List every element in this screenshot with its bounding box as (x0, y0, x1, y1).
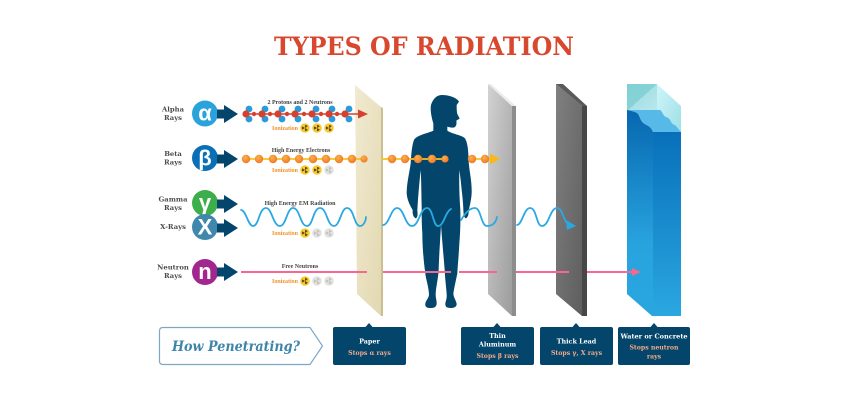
icon: neutron (192, 259, 218, 285)
label: x-rays: X-Rays (160, 223, 186, 231)
arrow: gamma (217, 195, 238, 213)
info box: thin aluminum: Thin (489, 332, 506, 340)
arrow: beta (217, 150, 238, 168)
ionization: beta (272, 165, 334, 175)
info box: thick lead: Stops γ, X rays (551, 350, 603, 357)
beta particle stream (242, 154, 500, 164)
icon: beta (192, 145, 218, 171)
arrow: x (217, 219, 238, 237)
info box: water or concrete: Stops neutron (629, 344, 679, 352)
info box: thin aluminum: Stops β rays (476, 353, 519, 360)
caption: alpha: 2 Protons and 2 Neutrons (267, 100, 333, 106)
wave arrowhead (566, 220, 576, 230)
icon: gamma: γ (199, 190, 212, 215)
ionization: alpha: Ionization (272, 126, 299, 132)
caption: neutron: Free Neutrons (282, 264, 319, 270)
title: TYPES OF RADIATION (274, 32, 574, 62)
icon: neutron: n (198, 259, 212, 284)
icon: x: X (198, 214, 213, 240)
label: neutron rays: Neutron (157, 264, 189, 272)
label: alpha rays: Rays (164, 114, 182, 122)
caption: gamma: High Energy EM Radiation (265, 201, 336, 207)
icon: gamma (192, 190, 218, 216)
arrow: neutron (217, 263, 238, 281)
ionization: neutron: Ionization (272, 279, 299, 285)
label: alpha rays: Alpha (162, 106, 184, 114)
label: beta rays: Rays (164, 158, 182, 166)
row: alpha rays (161, 100, 368, 133)
info box: thick lead: Thick Lead (557, 338, 597, 346)
alpha particle stream (242, 106, 368, 122)
info box: paper: Stops α rays (348, 350, 391, 357)
electromagnetic wave (241, 208, 570, 226)
how penetrating callout (160, 328, 322, 364)
row: neutron rays (157, 259, 641, 286)
barrier: thin aluminum (488, 84, 516, 316)
ionization: beta: Ionization (272, 168, 299, 174)
how penetrating callout: How Penetrating? (171, 339, 301, 355)
label: gamma rays: Rays (164, 204, 182, 212)
human silhouette (407, 95, 472, 308)
arrow: alpha (217, 105, 238, 123)
icon: beta: β (198, 146, 212, 170)
label: neutron rays: Rays (164, 272, 182, 280)
info box: water or concrete (618, 323, 690, 365)
info box: thin aluminum (461, 323, 534, 365)
label: gamma rays: Gamma (158, 196, 188, 204)
icon: x (192, 214, 218, 240)
info box: paper: Paper (359, 338, 380, 346)
label: beta rays: Beta (164, 150, 182, 158)
caption: beta: High Energy Electrons (272, 148, 331, 154)
barrier: paper (355, 85, 383, 316)
barrier: water or concrete (627, 84, 681, 316)
info box: water or concrete: Water or Concrete (619, 332, 688, 340)
ionization: gamma (272, 228, 334, 238)
row: gamma and x-rays (158, 190, 576, 240)
neutron beam (241, 268, 641, 276)
row: beta rays (164, 145, 500, 175)
ionization: gamma: Ionization (272, 231, 299, 237)
info box: water or concrete: rays (647, 354, 662, 360)
ionization: neutron (272, 276, 334, 286)
info box: thick lead (540, 323, 613, 365)
icon: alpha: α (198, 100, 212, 126)
info box: thin aluminum: Aluminum (478, 340, 516, 348)
info box: paper (333, 323, 406, 365)
ionization: alpha (272, 123, 334, 133)
icon: alpha (192, 100, 218, 126)
barrier: thick lead (556, 84, 587, 316)
